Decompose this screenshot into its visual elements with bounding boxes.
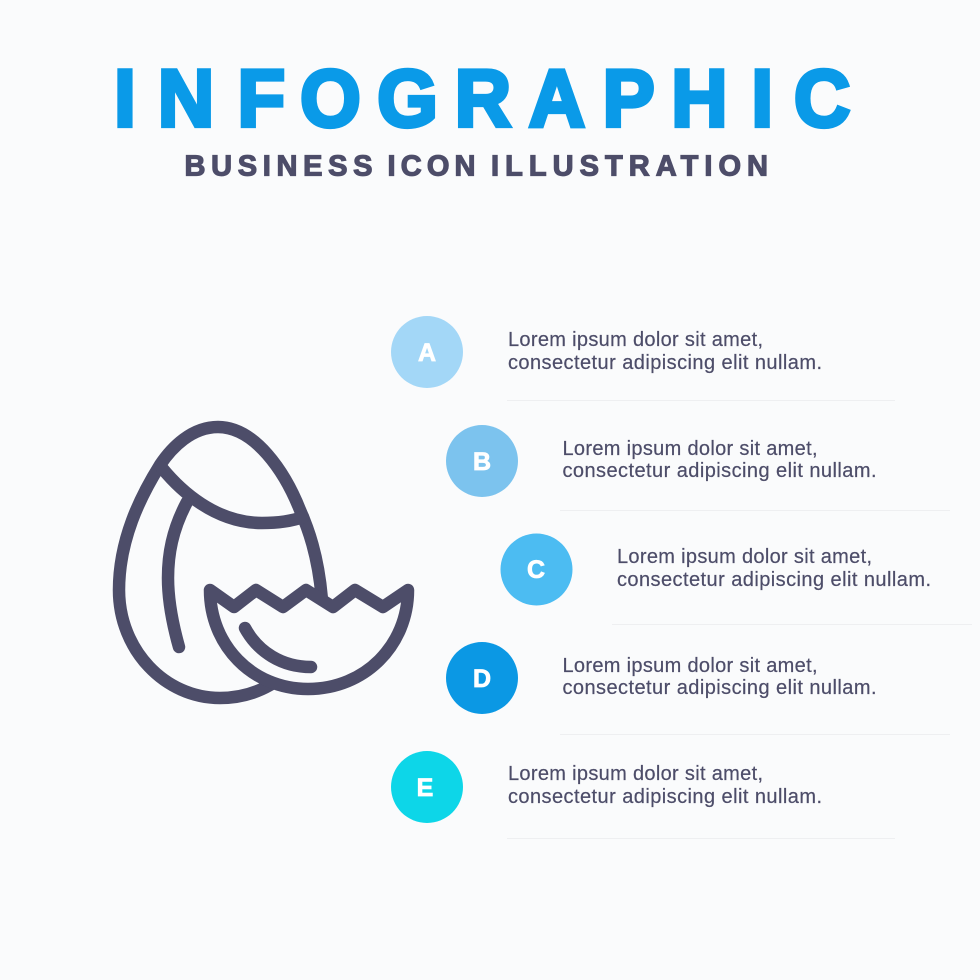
- badge E: [391, 751, 463, 823]
- item E: [391, 751, 895, 839]
- egg band: [162, 468, 303, 523]
- item C: [500, 534, 972, 625]
- text B: consectetur adipiscing elit nullam.: [562, 460, 876, 482]
- divider E: [507, 838, 895, 839]
- subtitle: BUSINESS: [184, 150, 372, 182]
- letter B: B: [473, 448, 491, 476]
- icon: cracked egg with shell: [119, 427, 408, 698]
- text E: Lorem ipsum dolor sit amet,: [508, 763, 763, 785]
- text A: consectetur adipiscing elit nullam.: [508, 352, 822, 374]
- egg outline: [119, 427, 322, 698]
- text C: Lorem ipsum dolor sit amet,: [617, 546, 872, 568]
- badge A: [391, 316, 463, 388]
- letter A: A: [418, 339, 436, 367]
- letter E: E: [417, 774, 433, 802]
- text D: consectetur adipiscing elit nullam.: [562, 677, 876, 699]
- text A: Lorem ipsum dolor sit amet,: [508, 329, 763, 351]
- badge D: [446, 642, 518, 714]
- text C: consectetur adipiscing elit nullam.: [617, 569, 931, 591]
- divider A: [507, 400, 895, 401]
- letter D: D: [473, 665, 491, 693]
- item A: [391, 316, 895, 401]
- badge C: [500, 534, 572, 606]
- divider D: [560, 734, 950, 735]
- broken shell: [210, 590, 408, 689]
- subtitle: ICON: [388, 150, 476, 182]
- shell inner curve: [245, 628, 311, 667]
- letter C: C: [527, 556, 545, 584]
- item B: [446, 425, 950, 511]
- title: INFOGRAPHIC: [114, 53, 850, 143]
- subtitle: [184, 150, 768, 182]
- text E: consectetur adipiscing elit nullam.: [508, 786, 822, 808]
- subtitle: ILLUSTRATION: [491, 150, 768, 182]
- item D: [446, 642, 950, 735]
- badge B: [446, 425, 518, 497]
- divider C: [612, 624, 972, 625]
- egg inner line: [168, 502, 187, 647]
- divider B: [560, 510, 950, 511]
- text D: Lorem ipsum dolor sit amet,: [562, 655, 818, 677]
- text B: Lorem ipsum dolor sit amet,: [562, 438, 818, 460]
